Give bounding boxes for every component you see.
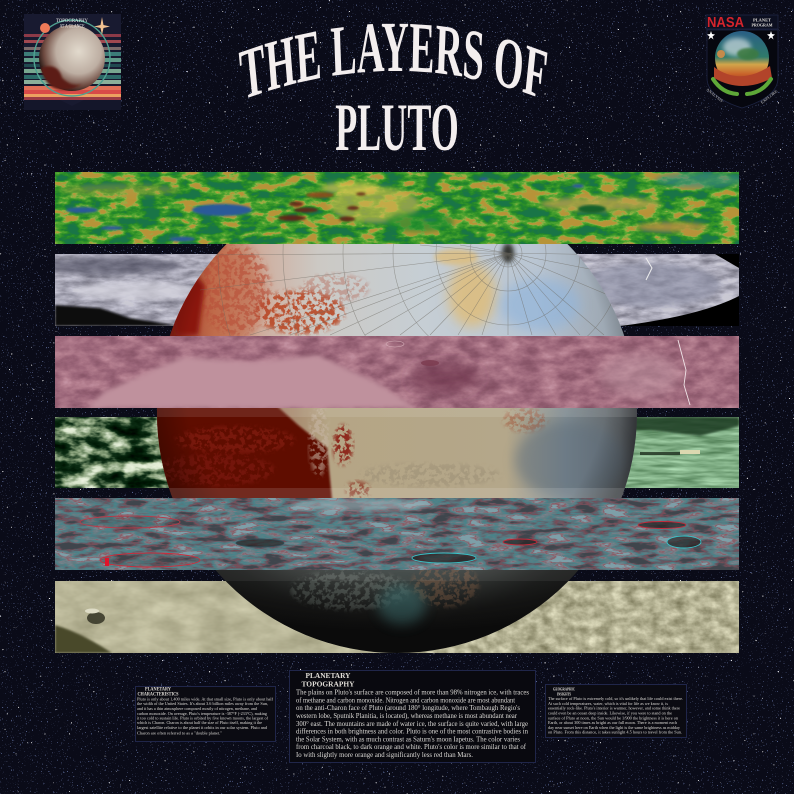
logo text [56,18,88,28]
band: khaki plains behind globe [55,581,739,653]
patch motto: EXPLORE [760,88,779,105]
globe: lower red and tan section [157,408,637,498]
panel body text: on the anti-Charon face of Pluto (around 180° longitude, where Tombaugh Regio's [296,704,520,712]
panel heading [302,672,354,688]
band: pink rugged terrain [55,336,739,408]
blue lowland patches [66,178,584,242]
title: second line: PLUTO [335,90,459,165]
brown peaks [278,192,366,222]
band: green mottled terrain behind globe [55,417,739,488]
patch header: PROGRAM [752,22,772,28]
Pluto globe [157,244,637,653]
veils over globe gaps [150,408,650,581]
band: red-cyan anaglyph terrain [55,498,739,570]
panel body text [296,688,529,759]
panel body text: from charcoal black, to dark orange and white. Pluto's color is more similar to that of [296,743,527,751]
panel body text: day near sunset here on Earth when the light is the same brightness as midday [548,725,680,730]
panel heading: PLANETARY [145,688,171,692]
patch header [706,15,778,31]
panel: planetary topography [290,670,536,762]
panel: planetary characteristics [136,686,276,742]
logo: NASA planet program patch [705,15,779,108]
panel body text: which is Charon. Charon is about half the size of Pluto itself, making it the [137,720,262,726]
logo Pluto sphere [39,25,105,91]
dark and teal accents [578,205,606,213]
panel heading [138,688,179,698]
yellow and orange uplands [60,182,708,232]
panel body text: and it has a thin atmosphere composed mostly of nitrogen, methane, and [137,706,257,712]
panel heading [553,686,575,696]
panel body text: surface of Pluto at noon, the Sun would be 1/900 the brightness it is here on [548,715,678,721]
panel body text: the width of the United States. It's about 3.6 billion miles away from the Sun, [137,701,268,707]
band: colour topographic map [55,172,745,244]
dark basin [411,364,479,392]
title: curved first line: THE LAYERS OF [238,24,548,98]
title: curved first line [238,24,548,98]
panel body text: essentially rock-like. Pluto's interior is warmer, however, and some think there [548,706,680,712]
smooth plain [88,355,416,408]
patch shield [707,30,778,108]
globe: limb shading [157,264,637,653]
globe: upper section [170,244,624,336]
patch motto [705,87,779,105]
panel heading: TOPOGRAPHY [302,680,354,688]
patch motto: ANALYSIS [705,87,724,103]
panel body text: Io with slightly more orange and significantly less red than Mars. [296,751,473,759]
patch laurels [713,79,771,94]
band: grey terrain behind globe [40,254,739,326]
panel body text [548,696,683,736]
panel heading: INSIGHTS [557,692,571,696]
panel: geographic insights [546,684,686,738]
panel body text: on Pluto. From this distance, it takes sunlight 4.5 hours to travel from the Sun. [548,730,682,736]
patch header: NASA [707,15,744,31]
panel body text: carbon monoxide. On average, Pluto's temperature is -387°F (-233°C), making [137,711,267,717]
patch header: PLANET [753,18,771,22]
panel body text: The plains on Pluto's surface are composed of more than 98% nitrogen ice, with traces [296,688,529,696]
bright ridge [678,340,690,405]
panel body text: differences in both brightness and color. Pluto is one of the most contrastive bodies in [296,728,528,736]
panel body text: Charon are often referred to as a "double planet." [137,730,222,735]
title [238,24,548,165]
panel heading: PLANETARY [306,672,350,680]
panel body text: Pluto is only about 1,400 miles wide. At that small size, Pluto is only about half [137,697,274,703]
panel heading: GEOGRAPHIC [553,686,575,692]
panel body text: The surface of Pluto is extremely cold, so it's unlikely that life could exist there. [548,696,683,702]
panel body text: largest satellite relative to the planet it orbits in our solar system. Pluto and [137,725,267,730]
panel body text: At such cold temperatures, water, which is vital for life as we know it, is [548,701,668,707]
panel body text: the Solar System, with as much contrast as Saturn's moon Iapetus. The color varies [296,735,520,743]
logo ornament [24,100,121,110]
globe: graticule lines [200,244,611,336]
panel body text: 300° east. The mountains are made of water ice, the surface is quite varied, with large [296,720,528,728]
logo text: TOPOGRAPHY [56,19,88,24]
panel body text [137,697,274,735]
patch earth [714,31,772,86]
panel body text: western lobe, Sputnik Planitia, is located), whereas methane is most abundant near [296,712,518,720]
panel body text: could even be an ocean deep inside. Likewise, if you were to stand on the [548,710,672,716]
logo: topography at a glance [24,14,121,110]
panel body text: it too cold to sustain life. Pluto is orbited by five known moons, the largest of [137,716,269,722]
logo text: AT A GLANCE [60,24,84,30]
globe: dark southern section [216,570,578,653]
panel heading: CHARACTERISTICS [138,692,179,698]
logo stripes [24,34,121,100]
craters [80,516,701,567]
panel body text: Earth, or about 300 times as bright as our full moon. There is a moment each [548,720,677,726]
panel body text: of methane and carbon monoxide. Nitrogen and carbon monoxide are most abundant [296,696,515,704]
